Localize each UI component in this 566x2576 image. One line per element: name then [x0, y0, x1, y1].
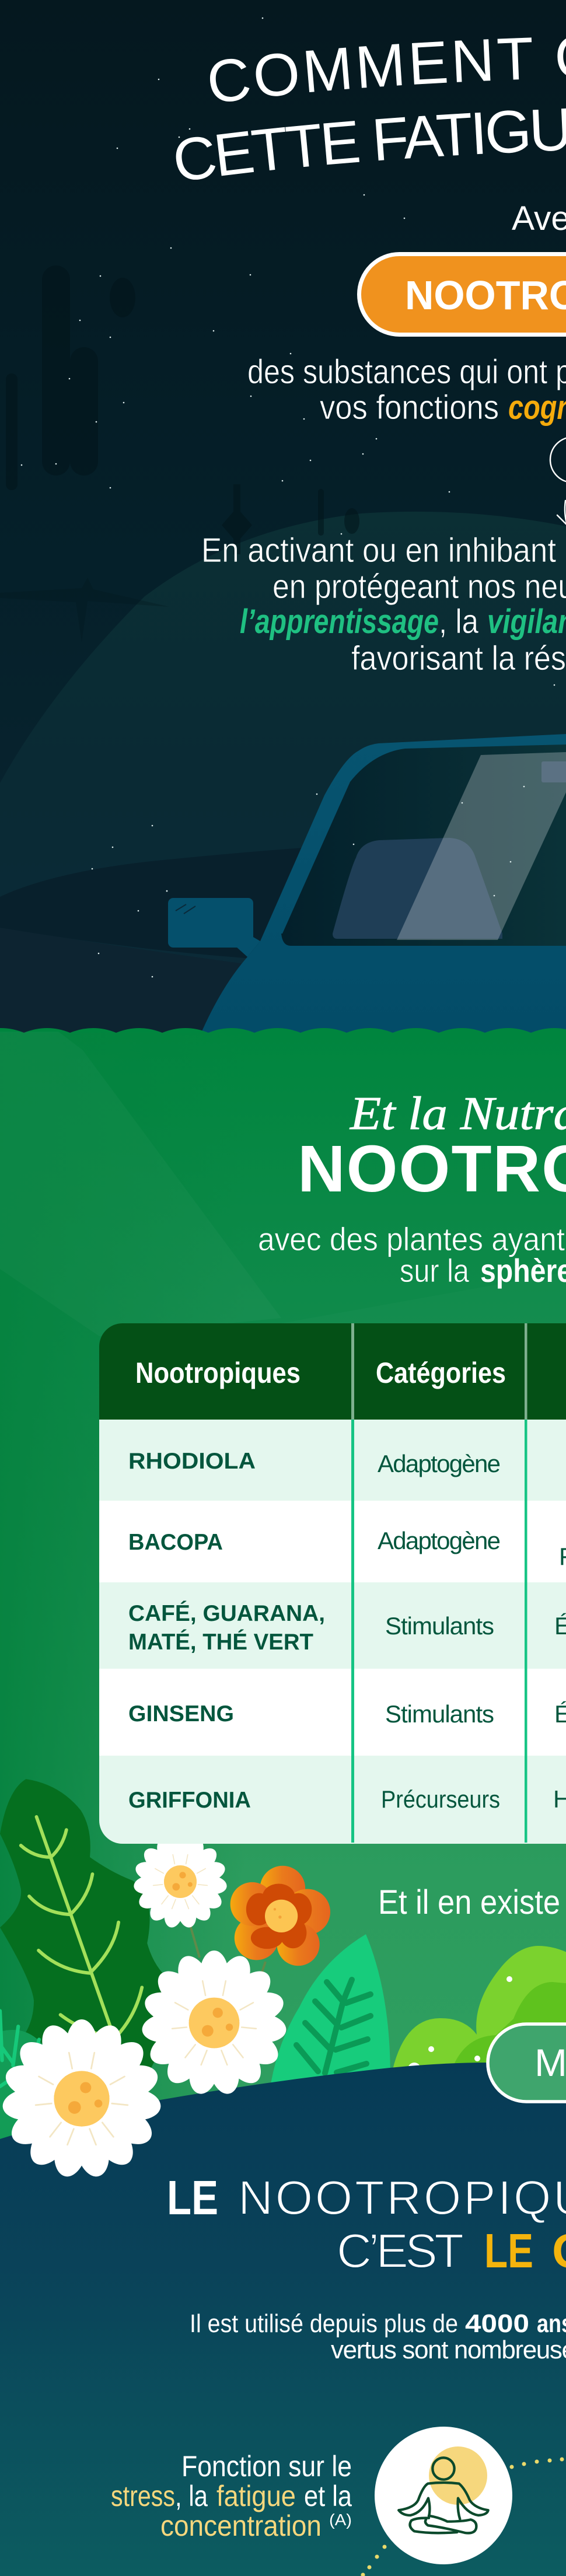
- table zebra rows: [99, 1420, 566, 1844]
- green pill: [488, 2024, 566, 2102]
- foliage: big green leaf: [268, 1934, 390, 2100]
- column dividers: [351, 1323, 527, 1843]
- paragraph: 4000 ans: Il est utilisé depuis plus de: [190, 2309, 458, 2338]
- benefit text: stress fatigue concentration: [111, 2450, 352, 2542]
- subheading: sur la: [400, 1252, 470, 1289]
- benefit text: stress fatigue concentration: concentration: [160, 2509, 322, 2542]
- description text: vos fonctions: [320, 389, 499, 427]
- row: café guarana: [128, 1600, 566, 1655]
- window reflection: [397, 752, 566, 940]
- row: rhodiola: Adaptogène: [378, 1450, 501, 1477]
- green pill: M: [534, 2041, 566, 2084]
- foliage: bottom-left fern leaf: [0, 2011, 83, 2167]
- column headers: Nootropiques: [135, 1357, 301, 1389]
- background foliage: [0, 1779, 566, 2167]
- table: [99, 1323, 566, 1844]
- row: rhodiola: RHODIOLA: [128, 1449, 256, 1474]
- column headers: [137, 1361, 505, 1389]
- mechanism text: , la: [439, 603, 479, 641]
- stars: [21, 18, 555, 977]
- row: griffonia: GRIFFONIA: [128, 1788, 251, 1813]
- benefit text: stress fatigue concentration: (A): [329, 2511, 352, 2529]
- mechanism text: l’apprentissage: [240, 603, 439, 641]
- row: café guarana: Stimulants: [385, 1612, 494, 1640]
- large daisy left: [1, 2019, 162, 2180]
- foliage: lime bushes: [391, 1946, 566, 2100]
- row: bacopa: Adaptogène: [378, 1527, 501, 1554]
- foliage: lime fern: [21, 1817, 142, 2050]
- tree silhouettes: [0, 265, 359, 642]
- column headers: Catégories: [376, 1357, 506, 1389]
- benefit text: stress fatigue concentration: stress: [111, 2480, 175, 2512]
- paragraph: 4000 ans: 4000: [465, 2309, 529, 2338]
- title: [176, 37, 566, 180]
- road swoosh: [0, 846, 327, 963]
- row: bacopa: BACOPA: [128, 1530, 223, 1555]
- small daisy: [133, 1835, 228, 1930]
- night background: [0, 0, 566, 1039]
- orange pill: nootropiques: [359, 254, 566, 335]
- green section background: [0, 1028, 566, 2159]
- car side mirror: [168, 898, 260, 957]
- blue section background: [0, 2060, 566, 2576]
- headrest highlight: [541, 761, 566, 782]
- row: griffonia: Précurseurs: [381, 1785, 500, 1813]
- icon: looped arrow: [550, 437, 566, 525]
- paragraph: 4000 ans: [190, 2309, 566, 2364]
- mechanism text: [201, 532, 566, 677]
- benefit text: stress fatigue concentration: et la: [304, 2480, 352, 2512]
- car window: [281, 745, 566, 946]
- benefit text: stress fatigue concentration: fatigue: [216, 2480, 296, 2512]
- row: ginseng: GINSENG: [128, 1701, 234, 1726]
- icon: meditation: [375, 2427, 512, 2564]
- row: café guarana: CAFÉ, GUARANA,: [128, 1600, 325, 1626]
- heading: le nootropique: LE: [167, 2170, 218, 2225]
- row: griffonia: [130, 1789, 566, 1808]
- description text: [247, 353, 566, 427]
- heading: nutraceutique: Et la Nutra: [350, 1088, 566, 1140]
- heading: le nootropique: [167, 2170, 566, 2278]
- hill: [0, 512, 566, 1039]
- lower ground: [0, 928, 280, 1039]
- car body: [201, 734, 566, 1034]
- car seat: [333, 838, 502, 939]
- orange flower: [230, 1866, 330, 1966]
- large daisy right: [141, 1951, 288, 2096]
- foliage: dark blob: [0, 1779, 169, 2089]
- heading: le nootropique: LE: [484, 2224, 533, 2278]
- row: café guarana: MATÉ, THÉ VERT: [128, 1629, 313, 1655]
- row: bacopa: [130, 1531, 566, 1565]
- subheading: [258, 1221, 566, 1289]
- car: [166, 734, 566, 1034]
- table header row: [99, 1323, 566, 1420]
- row: ginseng: [130, 1701, 566, 1722]
- benefit text: stress fatigue concentration: Fonction sur le: [181, 2450, 352, 2483]
- heading: le nootropique: C’EST: [337, 2224, 464, 2278]
- row: rhodiola: [130, 1453, 499, 1477]
- title: CETTE FATIGU: [176, 109, 566, 180]
- dotted connectors: [361, 2458, 564, 2576]
- flower stems: [190, 1925, 265, 1972]
- benefit text: stress fatigue concentration: , la: [175, 2480, 208, 2512]
- row: ginseng: Stimulants: [385, 1700, 494, 1728]
